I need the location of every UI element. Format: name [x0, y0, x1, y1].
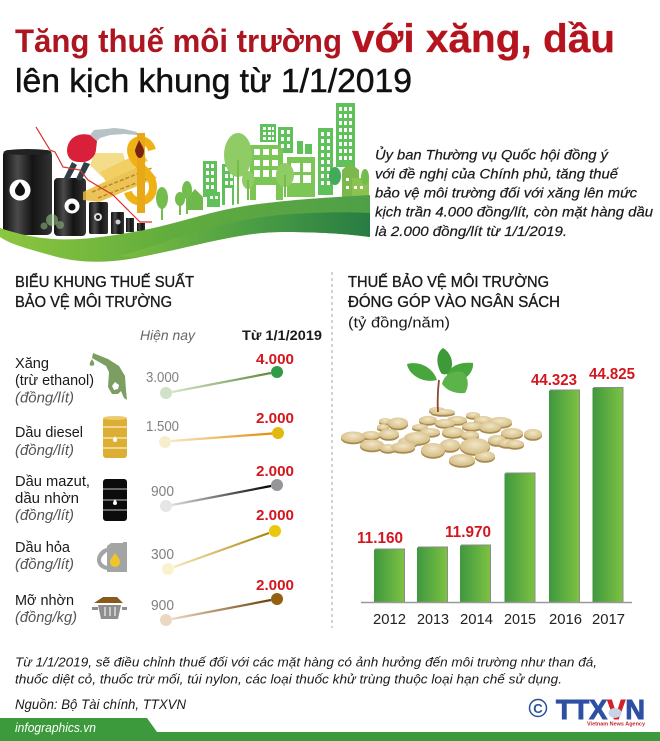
- intro paragraph: bảo vệ môi trường đối với xăng lên mức: [375, 186, 637, 200]
- row: Xăng: 4.000: [256, 351, 294, 368]
- row: Dầu hỏa: (đồng/lít): [15, 557, 74, 573]
- footer bar: [0, 718, 660, 741]
- row: Xăng: 3.000: [146, 370, 179, 386]
- intro paragraph: Ủy ban Thường vụ Quốc hội đồng ý: [375, 148, 609, 162]
- row: Mỡ nhờn: Mỡ nhờn: [15, 593, 74, 609]
- value labels: [357, 366, 635, 547]
- heading: budget contribution: ĐÓNG GÓP VÀO NGÂN SÁCH: [348, 294, 560, 311]
- logo: TTXVN: TTXVN: [556, 694, 645, 725]
- row: Mỡ nhờn: 900: [151, 598, 174, 614]
- icon: trees: [156, 133, 369, 220]
- bar chart: [357, 366, 635, 628]
- icon: oil can: [97, 542, 127, 572]
- heading: budget contribution: (tỷ đồng/năm): [348, 314, 450, 332]
- logo: TTXVN: Vietnam News Agency: [587, 722, 646, 728]
- intro paragraph: là 2.000 đồng/lít từ 1/1/2019.: [375, 224, 567, 239]
- title: lên kịch khung từ 1/1/2019: [15, 63, 412, 100]
- icon: oil barrels: [3, 149, 145, 236]
- heading: tax rate frame: BẢO VỆ MÔI TRƯỜNG: [15, 294, 172, 311]
- row: Xăng: [15, 351, 294, 406]
- panel: budget contribution: [341, 274, 635, 628]
- icon: coin pile with sprout: [341, 348, 542, 468]
- note paragraph: Từ 1/1/2019, sẽ điều chỉnh thuế đối với các mặt hàng có ảnh hưởng đến môi trường như than đá,: [15, 654, 597, 670]
- value labels: 44.825: [589, 366, 635, 383]
- year labels: 2017: [592, 612, 625, 628]
- row: Dầu hỏa: Dầu hỏa: [15, 540, 71, 556]
- website: infographics.vn: [15, 720, 96, 735]
- row: Dầu mazut, dầu nhờn: 2.000: [256, 463, 294, 480]
- row: Xăng: (trừ ethanol): [15, 373, 94, 389]
- year labels: 2016: [549, 612, 582, 628]
- icon: black barrel: [103, 479, 127, 521]
- heading: tax rate frame: [15, 273, 195, 311]
- intro paragraph: [375, 148, 654, 239]
- bar shadows: [375, 387, 624, 602]
- heading: tax rate frame: BIỂU KHUNG THUẾ SUẤT: [15, 273, 195, 291]
- column headers: Từ 1/1/2019: [242, 327, 322, 343]
- row: Dầu mazut, dầu nhờn: 900: [151, 484, 174, 500]
- icon: fuel nozzle: [64, 128, 137, 181]
- year labels: [373, 612, 625, 628]
- row: Dầu diesel: (đồng/lít): [15, 443, 74, 459]
- note paragraph: thuốc diệt cỏ, thuốc trừ mối, túi nylon, các loại thuốc khử trùng thuộc loại hạn chế sử dụng.: [15, 672, 562, 686]
- intro paragraph: kịch trần 4.000 đồng/lít, còn mặt hàng dầu: [375, 204, 654, 220]
- icon: green ground swoosh: [0, 195, 370, 262]
- icon: yellow barrel: [103, 416, 127, 458]
- note paragraph: [15, 654, 597, 686]
- row: Xăng: (đồng/lít): [15, 390, 74, 406]
- illustration: oil barrels, fuel nozzle and green city: [0, 103, 370, 262]
- panel: tax rate frame: [15, 273, 322, 626]
- row: Xăng: Xăng: [15, 356, 49, 372]
- icon: green city buildings: [188, 103, 369, 210]
- row: Mỡ nhờn: [15, 577, 294, 626]
- icon: fuel pump nozzle: [90, 353, 127, 400]
- row: Dầu mazut, dầu nhờn: dầu nhờn: [15, 491, 79, 507]
- logo: TTXVN: C: [533, 701, 543, 716]
- year labels: 2014: [460, 612, 493, 628]
- title: với xăng, dầu: [352, 17, 615, 61]
- year labels: 2012: [373, 612, 406, 628]
- icon: gold dollar sign and bars: [83, 133, 157, 213]
- row: Dầu diesel: 2.000: [256, 410, 294, 427]
- row: Dầu hỏa: 2.000: [256, 507, 294, 524]
- row: Mỡ nhờn: 2.000: [256, 577, 294, 594]
- year labels: 2015: [504, 612, 536, 628]
- row: Dầu diesel: 1.500: [146, 419, 179, 435]
- row: Dầu diesel: Dầu diesel: [15, 425, 83, 441]
- row: Dầu mazut, dầu nhờn: (đồng/lít): [15, 508, 74, 524]
- heading: budget contribution: THUẾ BẢO VỆ MÔI TRƯỜNG: [348, 274, 549, 291]
- year labels: 2013: [417, 612, 449, 628]
- icon: grease bucket: [92, 597, 127, 619]
- row: Dầu hỏa: [15, 507, 294, 575]
- column headers: Hiện nay: [140, 327, 196, 343]
- row: Dầu diesel: [15, 410, 294, 459]
- row: Dầu mazut, dầu nhờn: Dầu mazut,: [15, 474, 90, 490]
- row: Mỡ nhờn: (đồng/kg): [15, 610, 77, 626]
- intro paragraph: với đề nghị của Chính phủ, tăng thuế: [375, 166, 620, 182]
- falling red line: [36, 127, 152, 222]
- row: Dầu hỏa: 300: [151, 547, 174, 563]
- source: Nguồn: Bộ Tài chính, TTXVN: [15, 696, 187, 712]
- value labels: 44.323: [531, 372, 577, 389]
- column headers: [140, 327, 322, 343]
- value labels: 11.970: [445, 524, 491, 541]
- title: [15, 17, 615, 100]
- value labels: 11.160: [357, 530, 403, 547]
- icon: building windows: [206, 107, 363, 205]
- heading: budget contribution: [348, 274, 560, 332]
- row: Dầu mazut, dầu nhờn: [15, 463, 294, 524]
- title: Tăng thuế môi trường: [15, 23, 342, 59]
